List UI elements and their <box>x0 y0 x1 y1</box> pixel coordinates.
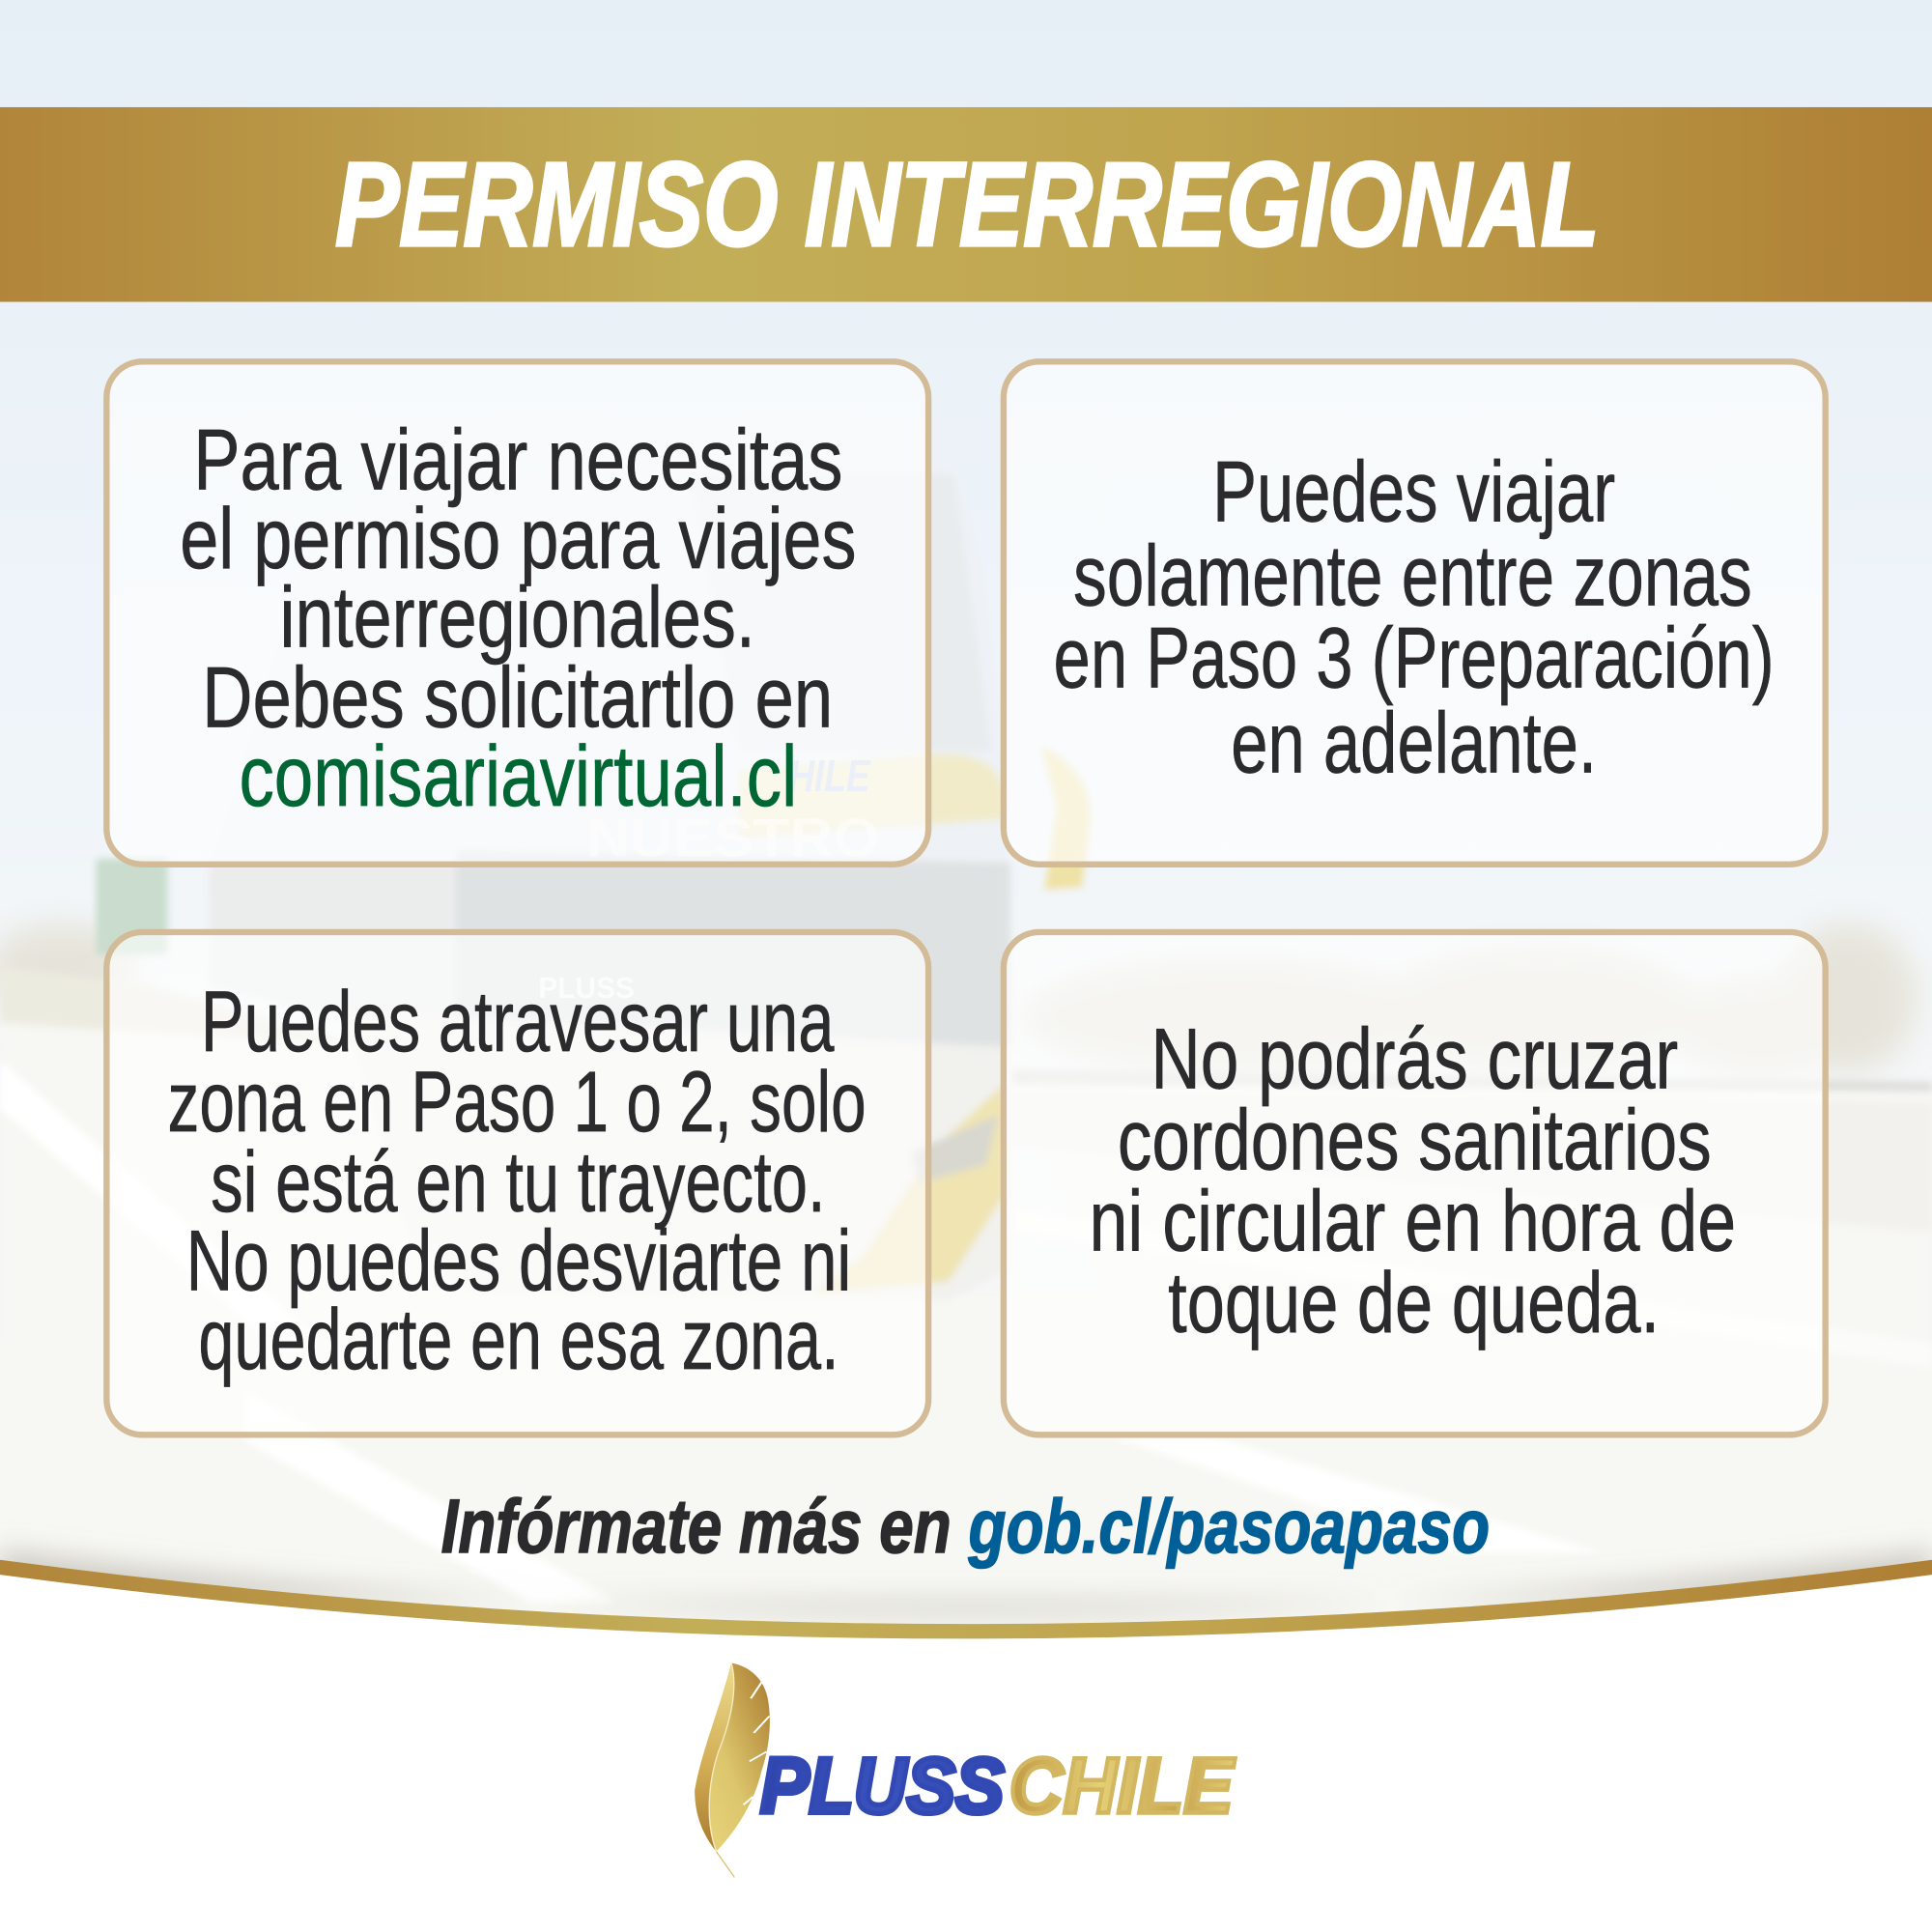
text: crossing zones <box>167 973 867 1387</box>
text: crossing zones: zona en Paso 1 o 2, solo <box>167 1053 867 1150</box>
wordmark: CHILE: CHILE <box>1009 1742 1236 1830</box>
text: restrictions <box>1090 1009 1736 1350</box>
footer call to action <box>441 1483 1490 1569</box>
background photo: faded bus on highway: NUESTRO <box>586 807 880 867</box>
text: restrictions: ni circular en hora de <box>1090 1173 1736 1269</box>
text: allowed zones <box>1054 443 1775 791</box>
logo: Pluss Chile <box>695 1663 1236 1877</box>
text: crossing zones: Puedes atravesar una <box>201 973 835 1069</box>
text: crossing zones: si está en tu trayecto. <box>211 1133 826 1230</box>
text: crossing zones: quedarte en esa zona. <box>198 1291 839 1387</box>
panel: permit requirement <box>106 361 928 865</box>
text: restrictions: toque de queda. <box>1168 1254 1660 1350</box>
text: permit requirement: el permiso para viajes <box>180 490 856 586</box>
background photo: faded bus on highway: HILE <box>788 751 871 801</box>
background photo: faded bus on highway: PLUSS <box>538 972 635 1005</box>
text: permit requirement: comisariavirtual.cl <box>239 727 797 824</box>
text: permit requirement <box>180 411 856 824</box>
footer call to action: Infórmate más en <box>441 1483 952 1569</box>
text: permit requirement: Para viajar necesitas <box>193 411 842 507</box>
title: PERMISO INTERREGIONAL <box>335 138 1600 271</box>
text: permit requirement: Debes solicitartlo en <box>202 649 833 746</box>
text: allowed zones: en adelante. <box>1231 695 1597 791</box>
panel: crossing zones <box>106 932 928 1435</box>
wordmark: PLUSS: PLUSS <box>760 1742 1005 1830</box>
text: allowed zones: solamente entre zonas <box>1073 526 1752 623</box>
panel: allowed zones <box>1004 361 1826 865</box>
footer call to action: gob.cl/pasoapaso <box>968 1483 1490 1569</box>
icon: golden feather <box>695 1663 770 1877</box>
bottom white area with gold arc <box>0 1550 1932 1932</box>
title banner <box>0 107 1932 301</box>
text: restrictions: No podrás cruzar <box>1151 1009 1678 1106</box>
text: crossing zones: No puedes desviarte ni <box>186 1211 851 1308</box>
panel: restrictions <box>1004 932 1826 1435</box>
text: restrictions: cordones sanitarios <box>1118 1091 1712 1187</box>
text: allowed zones: Puedes viajar <box>1212 443 1615 540</box>
text: permit requirement: interregionales. <box>280 569 755 666</box>
